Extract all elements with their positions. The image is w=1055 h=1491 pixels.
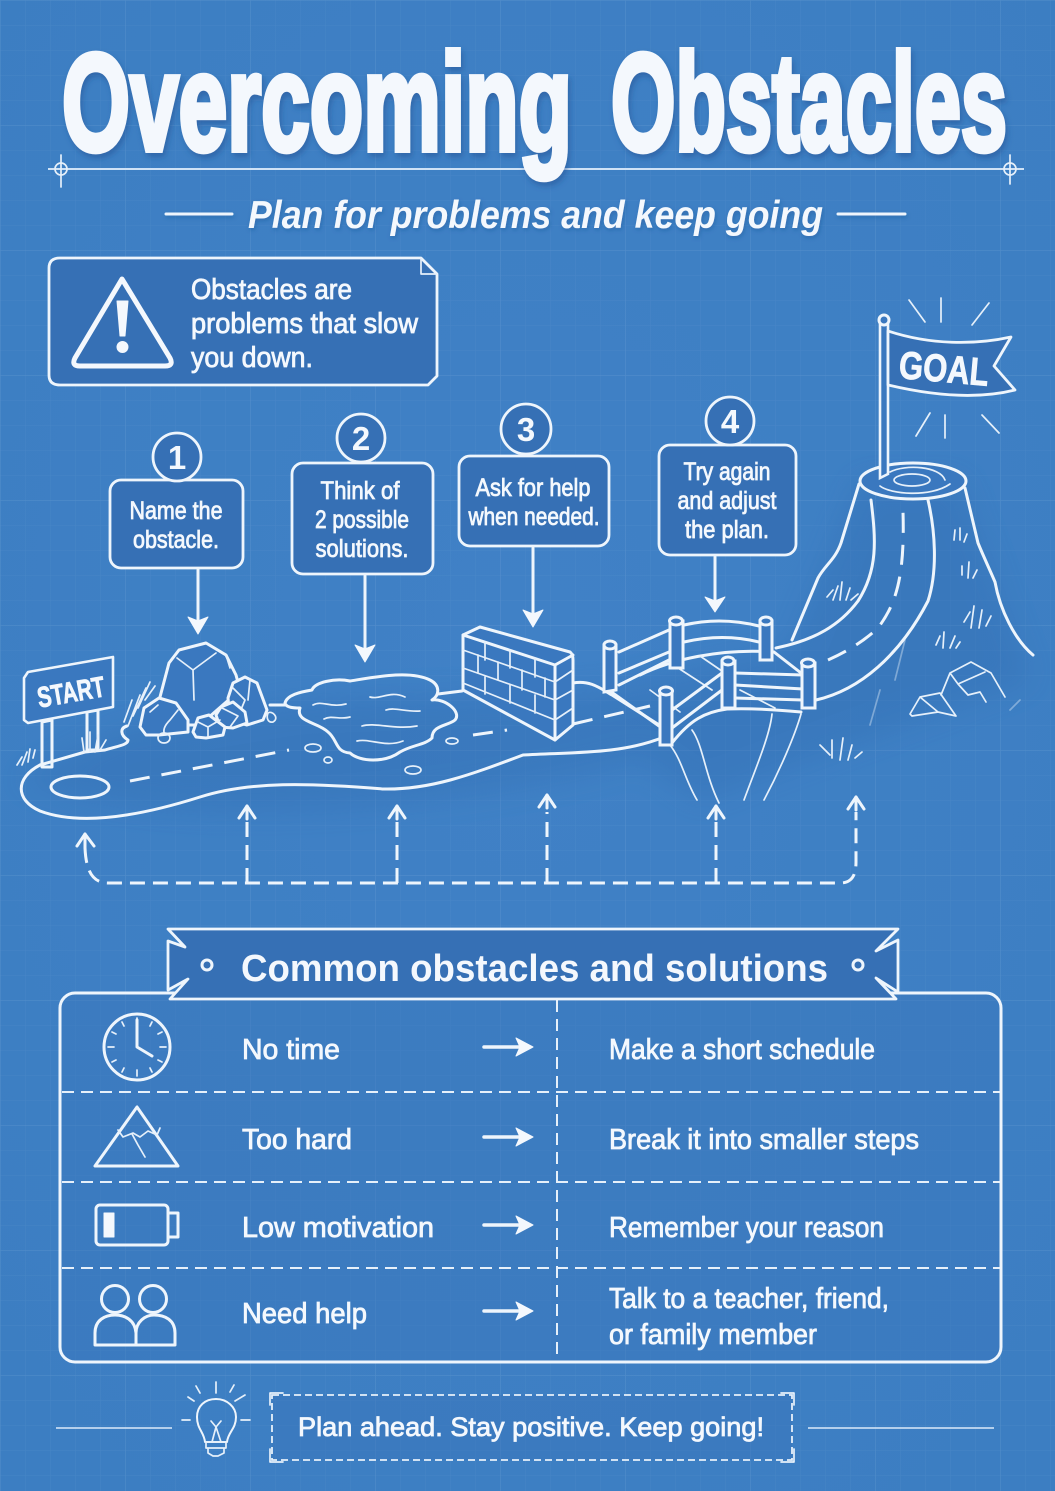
row 1: No time <box>242 1034 340 1066</box>
row 3: Remember your reason <box>609 1212 884 1244</box>
row 4: Talk to a teacher, friend, <box>609 1283 889 1315</box>
arrow: step 3 <box>523 548 543 627</box>
step 2 callout <box>292 414 433 574</box>
arrow: step 2 <box>355 576 375 662</box>
step 2 callout: solutions. <box>316 535 408 563</box>
row 2: Too hard <box>242 1124 352 1156</box>
deck <box>610 651 801 743</box>
row 4: Need help <box>242 1298 367 1330</box>
back rails <box>619 621 759 685</box>
row 1 <box>242 1034 875 1066</box>
obstacle: bridge <box>604 617 815 803</box>
title: Overcoming <box>62 26 572 180</box>
step 2 callout: 2 <box>352 420 370 457</box>
row 2: Break it into smaller steps <box>609 1124 919 1156</box>
step 4 callout: and adjust <box>678 487 777 515</box>
dashed return arrows <box>77 795 864 883</box>
road path <box>21 500 934 818</box>
icon: mountain <box>95 1107 178 1166</box>
row 3 <box>242 1212 884 1244</box>
goal mountain <box>792 463 1033 760</box>
step 3 callout <box>459 404 609 546</box>
definition text: you down. <box>191 342 313 374</box>
arrow: step 4 <box>705 557 725 612</box>
bridge posts <box>604 617 815 745</box>
step 2 callout: Think of <box>320 477 400 505</box>
obstacle: brick wall <box>463 627 573 740</box>
goal flag: GOAL <box>897 344 991 395</box>
closing message box <box>270 1393 794 1462</box>
step 1 callout: 1 <box>168 439 186 476</box>
step 1 callout: Name the <box>130 497 222 525</box>
obstacle: rocks <box>124 643 276 743</box>
closing message box: Plan ahead. Stay positive. Keep going! <box>298 1412 764 1442</box>
row 1: Make a short schedule <box>609 1034 875 1066</box>
icon: low battery <box>96 1205 178 1245</box>
step 4 callout: the plan. <box>685 516 769 544</box>
panel: obstacle definition <box>49 258 437 385</box>
step 1 callout: obstacle. <box>133 526 219 554</box>
definition text: problems that slow <box>191 308 419 340</box>
definition text: Obstacles are <box>191 274 352 306</box>
row 3: Low motivation <box>242 1212 434 1244</box>
step 3 callout: when needed. <box>468 503 600 531</box>
start marker <box>51 776 109 798</box>
step 4 callout: 4 <box>721 403 740 440</box>
step 3 callout: 3 <box>517 411 535 448</box>
step 4 callout: Try again <box>684 458 770 486</box>
step 2 callout: 2 possible <box>315 506 409 534</box>
grass tufts <box>820 528 991 760</box>
goal flag <box>879 298 1015 478</box>
panel: obstacles and solutions table <box>60 993 1001 1362</box>
obstacle: pond <box>285 675 458 774</box>
icon: two people <box>95 1286 175 1345</box>
subtitle: Plan for problems and keep going <box>248 194 823 237</box>
row 4: or family member <box>609 1319 817 1351</box>
road dashes <box>130 512 903 781</box>
icon: clock <box>104 1014 170 1080</box>
ravine <box>670 714 801 803</box>
arrow: step 1 <box>188 570 208 634</box>
step 3 callout: Ask for help <box>476 474 590 502</box>
sparkle rays <box>909 298 999 438</box>
title rule with crosshairs <box>48 155 1024 187</box>
banner heading <box>168 929 898 999</box>
start sign: START <box>35 671 108 715</box>
definition text <box>191 274 419 374</box>
banner heading: Common obstacles and solutions <box>241 948 828 990</box>
step 4 callout <box>659 397 796 555</box>
row 4 <box>242 1283 889 1351</box>
icon: light bulb <box>182 1382 250 1456</box>
rocks by mountain <box>941 662 1005 702</box>
start sign <box>17 657 113 767</box>
grass by rocks <box>124 682 155 726</box>
icon: warning triangle <box>74 279 171 366</box>
step 1 callout <box>110 433 243 568</box>
footer rules <box>56 1427 994 1429</box>
row 2 <box>242 1124 919 1156</box>
front rails <box>672 673 803 728</box>
